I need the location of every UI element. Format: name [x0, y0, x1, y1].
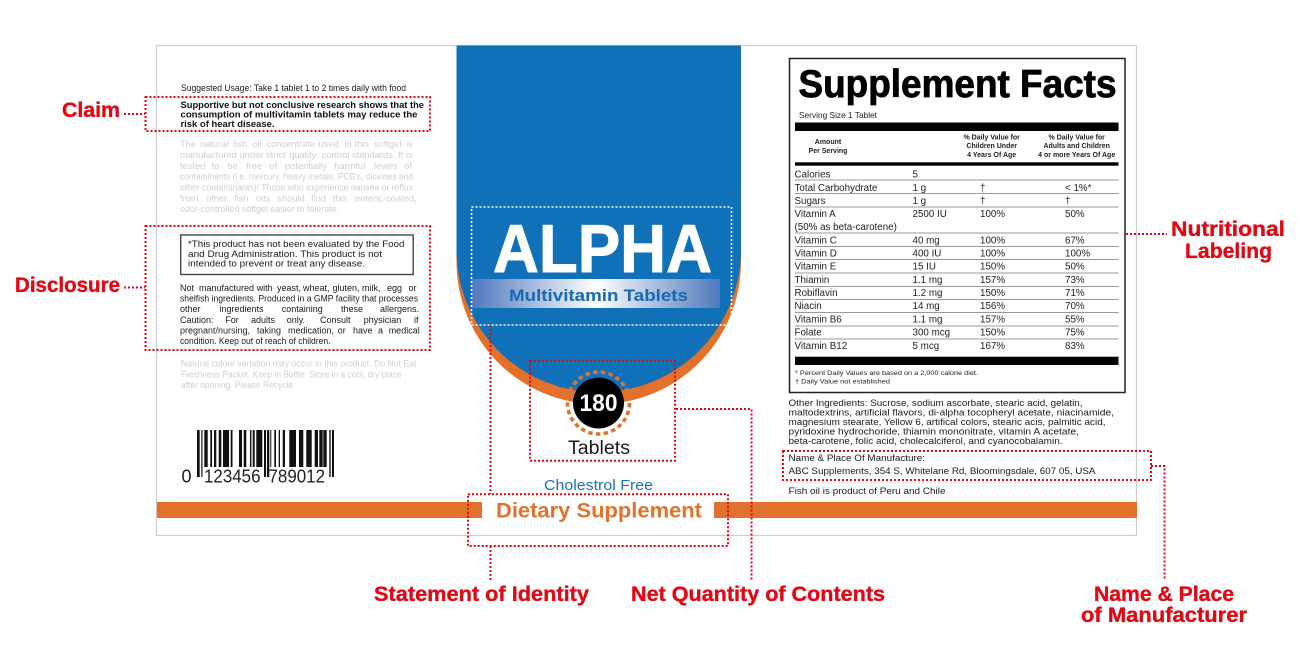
- icon: barcode: 123456: [204, 466, 260, 486]
- arrow: nutritional labeling leader: [1126, 233, 1167, 235]
- callout frame: disclosure: [146, 226, 430, 350]
- nutrient table: 71%: [1065, 288, 1085, 299]
- text: fish oil paragraph: used: [318, 139, 339, 149]
- text: fish oil paragraph: standards.: [352, 150, 395, 160]
- label: Nutritional Labeling: Labeling: [1185, 240, 1272, 263]
- nutrient table: 156%: [980, 301, 1005, 312]
- icon: barcode: [182, 430, 334, 486]
- icon: barcode: 789012: [268, 466, 325, 486]
- table column headers: Children Under: [966, 143, 1017, 150]
- text: allergen and caution paragraph: pregnant/nursing,: [180, 326, 250, 336]
- text: Tablets: Tablets: [568, 438, 630, 459]
- arrow: manufacturer leader: [1151, 466, 1164, 580]
- label: Nutritional Labeling: Nutritional: [1171, 218, 1285, 241]
- text: allergen and caution paragraph: physician: [364, 315, 401, 325]
- text: colour variation and storage note: after opening. Please Recycle: [181, 380, 293, 390]
- arrow: statement of identity leader: [490, 325, 492, 580]
- nutrient table: 157%: [980, 314, 1005, 325]
- text: fish oil paragraph: find: [311, 194, 326, 204]
- table bottom bar: [795, 357, 1118, 365]
- nutrient table: 1.1 mg: [912, 314, 942, 325]
- text: other ingredients: beta-carotene, folic acid, cholecalciferol, and cyanocobalamin.: [788, 436, 1062, 447]
- nutrient table: Vitamin C: [794, 236, 837, 246]
- text: fish oil paragraph: concentrate: [266, 139, 315, 149]
- nutrient table: 400 IU: [912, 248, 941, 260]
- text: other ingredients: magnesium stearate, Yellow 6, artifical colors, stearic acis, palmitic acid,: [788, 417, 1106, 428]
- text: allergen and caution paragraph: adults: [251, 315, 276, 325]
- text: allergen and caution paragraph: Not: [180, 283, 195, 293]
- text: Cholestrol Free: Cholestrol Free: [544, 477, 653, 494]
- brand name dotted frame: [472, 207, 732, 325]
- text: name and place of manufacture: ABC Supplements, 354 S, Whitelane Rd, Bloomingsdale, 607 05, USA: [788, 466, 1096, 477]
- text: allergen and caution paragraph: [180, 283, 420, 346]
- brand name: ALPHA: ALPHA: [493, 211, 712, 287]
- text: fish oil paragraph: this: [333, 194, 348, 204]
- nutrient table: 157%: [980, 275, 1005, 286]
- text: allergen and caution paragraph: shelfish ingredients. Produced in a GMP facility that processes: [180, 294, 418, 304]
- callout frame: net quantity of contents: [530, 361, 675, 461]
- text: fish oil origin: Fish oil is product of Peru and Chile: [788, 486, 946, 497]
- text: other ingredients: maltodextrins, artificial flavors, di-alpha tocopheryl acetate, niacinamide,: [788, 408, 1114, 418]
- nutrient table: 1 g: [912, 196, 926, 207]
- text: fish oil paragraph: control: [322, 150, 350, 160]
- product band: Multivitamin Tablets: [472, 279, 720, 308]
- text: allergen and caution paragraph: milk,: [362, 283, 380, 293]
- text: allergen and caution paragraph: condition. Keep out of reach of children.: [180, 336, 330, 346]
- text: allergen and caution paragraph: For: [225, 315, 239, 325]
- label: Name & Place of Manufacturer: of Manufacturer: [1081, 604, 1247, 627]
- text: allergen and caution paragraph: these: [341, 304, 363, 314]
- text: fish oil paragraph: strict: [266, 150, 286, 160]
- product band: Multivitamin Tablets: Multivitamin Tablets: [509, 286, 688, 305]
- text: name and place of manufacture: [788, 453, 1096, 477]
- nutrient table: 15 IU: [912, 262, 936, 272]
- header rule: [795, 162, 1118, 166]
- text: fish oil paragraph: free: [246, 161, 262, 171]
- text: fish oil paragraph: is: [406, 150, 413, 160]
- text: other ingredients: pyridoxine hydrochoride, thiamin mononitrate, vitamin A acetate,: [788, 427, 1079, 438]
- text: allergen and caution paragraph: other: [180, 304, 201, 314]
- text: allergen and caution paragraph: or: [408, 283, 417, 293]
- arrow: claim leader: [124, 113, 145, 115]
- nutrient table: 100%: [1065, 248, 1090, 260]
- text: allergen and caution paragraph: wheat,: [302, 283, 330, 293]
- footnotes: † Daily Value not established: [795, 379, 890, 386]
- callout: FDA disclaimer box: [181, 235, 413, 274]
- nutrient table: 150%: [980, 262, 1005, 272]
- text: allergen and caution paragraph: a: [378, 326, 383, 336]
- nutrient table: 100%: [980, 236, 1005, 246]
- nutrient table: 1.2 mg: [912, 288, 942, 299]
- table column headers: % Daily Value for: [963, 134, 1020, 142]
- callout: FDA disclaimer box: intended to prevent or treat any disease.: [188, 258, 365, 270]
- text: allergen and caution paragraph: medical: [389, 326, 420, 336]
- text: fish oil paragraph: oil: [252, 139, 262, 149]
- heading: Supplement Facts: Supplement Facts: [798, 63, 1116, 106]
- text: suggested usage: Suggested Usage: Take 1 tablet 1 to 2 times daily with food: [181, 83, 406, 93]
- text: allergen and caution paragraph: if: [414, 315, 419, 325]
- nutrient table: 100%: [980, 209, 1005, 220]
- text: allergen and caution paragraph: manufactured: [199, 283, 254, 293]
- table column headers: Per Serving: [809, 148, 847, 155]
- text: allergen and caution paragraph: egg: [387, 283, 402, 293]
- icon: barcode: 0: [182, 466, 192, 486]
- nutrient table: Calories: [794, 170, 831, 181]
- text: fish oil paragraph: contaminants (i.e. mercury, heavy metals, PCB's, dioxines and: [180, 172, 413, 182]
- text: fish oil paragraph: from: [180, 194, 199, 204]
- table column headers: Amount: [815, 139, 842, 146]
- text: fish oil paragraph: potentially: [285, 161, 327, 171]
- callout frame: name and place of manufacturer: [783, 451, 1151, 480]
- text: claim statement: consumption of multivitamin tablets may reduce the: [180, 110, 418, 120]
- text: fish oil paragraph: this: [354, 139, 369, 149]
- nutrient table: 100%: [980, 248, 1005, 260]
- table column headers: 4 or more Years Of Age: [1038, 152, 1115, 159]
- text: fish oil paragraph: fish: [233, 139, 247, 149]
- table column headers: % Daily Value for: [1048, 134, 1105, 142]
- text: allergen and caution paragraph: taking: [257, 326, 281, 336]
- text: allergen and caution paragraph: with: [256, 283, 273, 293]
- text: fish oil paragraph: fish: [234, 194, 248, 204]
- text: fish oil paragraph: be: [227, 161, 238, 171]
- text: other ingredients: Other Ingredients: Sucrose, sodium ascorbate, stearic acid, gelatin,: [788, 398, 1082, 409]
- text: fish oil paragraph: to: [212, 161, 219, 171]
- nutrient table: Robiflavin: [794, 288, 838, 299]
- nutrient table: Total Carbohydrate: [794, 183, 878, 194]
- text: fish oil paragraph: levels: [374, 161, 398, 171]
- tablet count badge: 180: [580, 390, 618, 417]
- label: Nutritional Labeling: [1171, 218, 1285, 263]
- panel: blue front label shield: [456, 46, 741, 404]
- nutrient table: Vitamin E: [794, 262, 837, 272]
- nutrient table: 1.1 mg: [912, 275, 942, 286]
- nutrient table: Vitamin B6: [794, 314, 842, 325]
- nutrient table: 14 mg: [912, 301, 940, 312]
- text: allergen and caution paragraph: containing: [282, 304, 323, 314]
- nutrient table: (50% as beta-carotene): [794, 222, 897, 233]
- label: Name & Place of Manufacturer: [1081, 583, 1247, 627]
- text: fish oil paragraph: in: [344, 139, 352, 149]
- text: claim statement: [180, 100, 424, 130]
- nutrient table: †: [980, 183, 985, 194]
- text: Dietary Supplement: Dietary Supplement: [496, 498, 702, 522]
- arrow: disclosure leader: [124, 286, 145, 288]
- text: fish oil paragraph: quality: [289, 150, 317, 160]
- table top bar: [795, 122, 1118, 131]
- text: allergen and caution paragraph: Caution:: [180, 315, 214, 325]
- nutrient table: Vitamin D: [794, 248, 837, 260]
- tablet count badge: [568, 372, 630, 434]
- text: fish oil paragraph: softgel: [374, 139, 401, 149]
- text: allergen and caution paragraph: gluten,: [332, 283, 360, 293]
- nutrient table: 50%: [1065, 209, 1085, 220]
- footnotes: * Percent Daily Values are based on a 2,000 calorie diet.: [795, 370, 978, 377]
- table column headers: Adults and Children: [1043, 143, 1110, 150]
- label: Net Quantity of Contents: Net Quantity of Contents: [631, 583, 885, 606]
- text: serving size: Serving Size 1 Tablet: [799, 110, 878, 120]
- text: fish oil paragraph: under: [240, 150, 263, 160]
- text: allergen and caution paragraph: medication,: [288, 326, 334, 336]
- nutrient table: < 1%*: [1065, 183, 1092, 194]
- text: fish oil paragraph: [180, 139, 416, 214]
- text: other ingredients: [788, 398, 1114, 447]
- nutrient table: 83%: [1065, 341, 1085, 352]
- label: Name & Place of Manufacturer: Name & Place: [1094, 583, 1234, 606]
- text: fish oil paragraph: other contaminants)/ Those who experience nausea or reflux: [180, 182, 413, 192]
- nutrient table: 55%: [1065, 314, 1085, 325]
- text: allergen and caution paragraph: only.: [287, 315, 305, 325]
- nutrient table: Folate: [794, 328, 822, 339]
- text: allergen and caution paragraph: have: [353, 326, 373, 336]
- text: fish oil paragraph: of: [404, 161, 412, 171]
- text: fish oil paragraph: enteric-coated,: [355, 194, 416, 204]
- text: name and place of manufacture: Name & Place Of Manufacture:: [788, 453, 925, 464]
- text: fish oil paragraph: harmful: [334, 161, 365, 171]
- nutrient table: 40 mg: [912, 236, 940, 246]
- text: fish oil paragraph: natural: [200, 139, 228, 149]
- nutrient table: 70%: [1065, 301, 1085, 312]
- callout: FDA disclaimer box: and Drug Administration. This product is not: [188, 249, 382, 260]
- nutrient table: 2500 IU: [912, 209, 947, 220]
- text: fish oil paragraph: It: [398, 150, 404, 160]
- text: allergen and caution paragraph: allergens.: [380, 304, 419, 314]
- nutrient table: Vitamin A: [794, 209, 836, 220]
- text: colour variation and storage note: Natural colour variation may occur in this product. Do Not Eat: [181, 359, 417, 369]
- text: fish oil paragraph: is: [406, 139, 413, 149]
- nutrient table: 50%: [1065, 262, 1085, 272]
- nutrient table: †: [980, 196, 985, 207]
- text: allergen and caution paragraph: or: [338, 326, 346, 336]
- text: fish oil paragraph: tested: [180, 161, 205, 171]
- text: fish oil paragraph: The: [180, 139, 196, 149]
- nutrient table: 167%: [980, 341, 1005, 352]
- nutrient table: 150%: [980, 328, 1005, 339]
- nutrient table: †: [1065, 196, 1070, 207]
- label: Disclosure: Disclosure: [15, 274, 120, 297]
- text: claim statement: Supportive but not conclusive research shows that the: [180, 100, 424, 111]
- arrow: net quantity leader: [676, 409, 752, 580]
- text: fish oil paragraph: should: [277, 194, 305, 204]
- panel: Supplement Facts: [790, 58, 1125, 392]
- text: fish oil paragraph: of: [269, 161, 277, 171]
- label outline: [156, 46, 1136, 536]
- footnotes: [795, 370, 978, 386]
- text: colour variation and storage note: Freshness Packet. Keep in Bottle. Store in a cool, dry place: [181, 370, 402, 380]
- nutrient table: 5: [912, 170, 918, 181]
- nutrient table: [794, 170, 1118, 352]
- text: allergen and caution paragraph: Consult: [320, 315, 351, 325]
- text: allergen and caution paragraph: yeast,: [277, 283, 301, 293]
- nutrient table: Sugars: [794, 196, 826, 207]
- text: colour variation and storage note: [181, 359, 417, 390]
- nutrient table: 75%: [1065, 328, 1085, 339]
- label: Claim: Claim: [62, 99, 120, 122]
- table column headers: 4 Years Of Age: [967, 152, 1016, 159]
- nutrient table: 150%: [980, 288, 1005, 299]
- callout frame: statement of identity: [468, 494, 728, 546]
- table column headers: [809, 134, 1115, 159]
- text: fish oil paragraph: oils: [256, 194, 270, 204]
- nutrient table: 300 mcg: [912, 328, 950, 339]
- text: fish oil paragraph: other: [206, 194, 227, 204]
- text: fish oil paragraph: odor-controlled softgel easier to tolerate.: [180, 204, 339, 214]
- callout: FDA disclaimer box: *This product has not been evaluated by the Food: [188, 239, 404, 250]
- text: allergen and caution paragraph: ingredients: [220, 304, 264, 314]
- nutrient table: 5 mcg: [912, 341, 939, 352]
- text: fish oil paragraph: manufactured: [180, 150, 237, 160]
- label: Statement of Identity: Statement of Identity: [374, 583, 589, 606]
- nutrient table: 73%: [1065, 275, 1085, 286]
- nutrient table: Thiamin: [794, 275, 829, 286]
- text: claim statement: risk of heart disease.: [180, 119, 274, 130]
- callout frame: claim: [146, 97, 430, 131]
- nutrient table: 1 g: [912, 183, 926, 194]
- nutrient table: Vitamin B12: [794, 341, 847, 352]
- orange band: [157, 502, 1137, 518]
- nutrient table: Niacin: [794, 301, 822, 312]
- nutrient table: 67%: [1065, 236, 1085, 246]
